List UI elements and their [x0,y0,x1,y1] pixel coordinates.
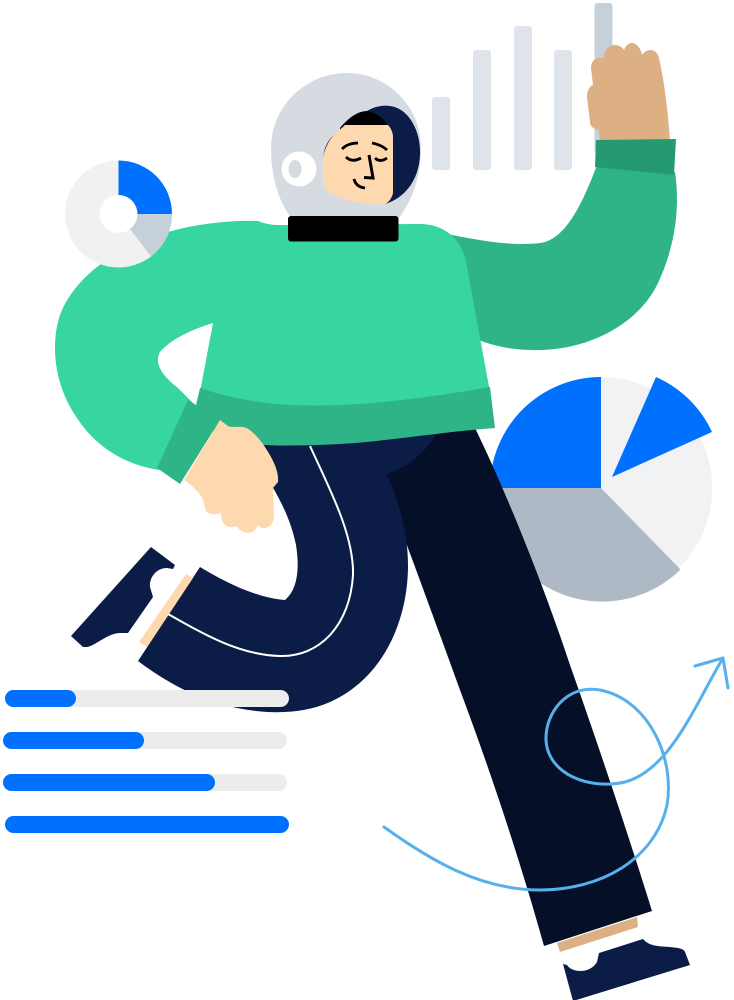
back shoe [71,547,175,647]
left cuff [157,400,220,484]
bar chart [432,3,612,170]
large pie chart [490,377,712,602]
looping arrow [384,658,728,890]
small donut chart [65,160,172,268]
front leg [138,432,437,712]
helmet ring [282,152,316,186]
progress bars [3,690,289,833]
neck collar [288,216,398,242]
back arm sweater [430,165,677,350]
back leg [385,428,652,946]
helmet [271,73,421,218]
sweater hem [196,387,495,446]
raised hand [587,43,670,142]
sweater body and left arm [55,221,490,470]
front ankle [557,917,638,952]
back ankle [139,574,193,647]
raised arm cuff [595,139,676,175]
hair [323,106,420,204]
front hand [184,420,278,533]
facial features [342,143,387,188]
trouser seam [168,446,353,656]
front shoe [563,939,690,1000]
face [323,125,393,204]
